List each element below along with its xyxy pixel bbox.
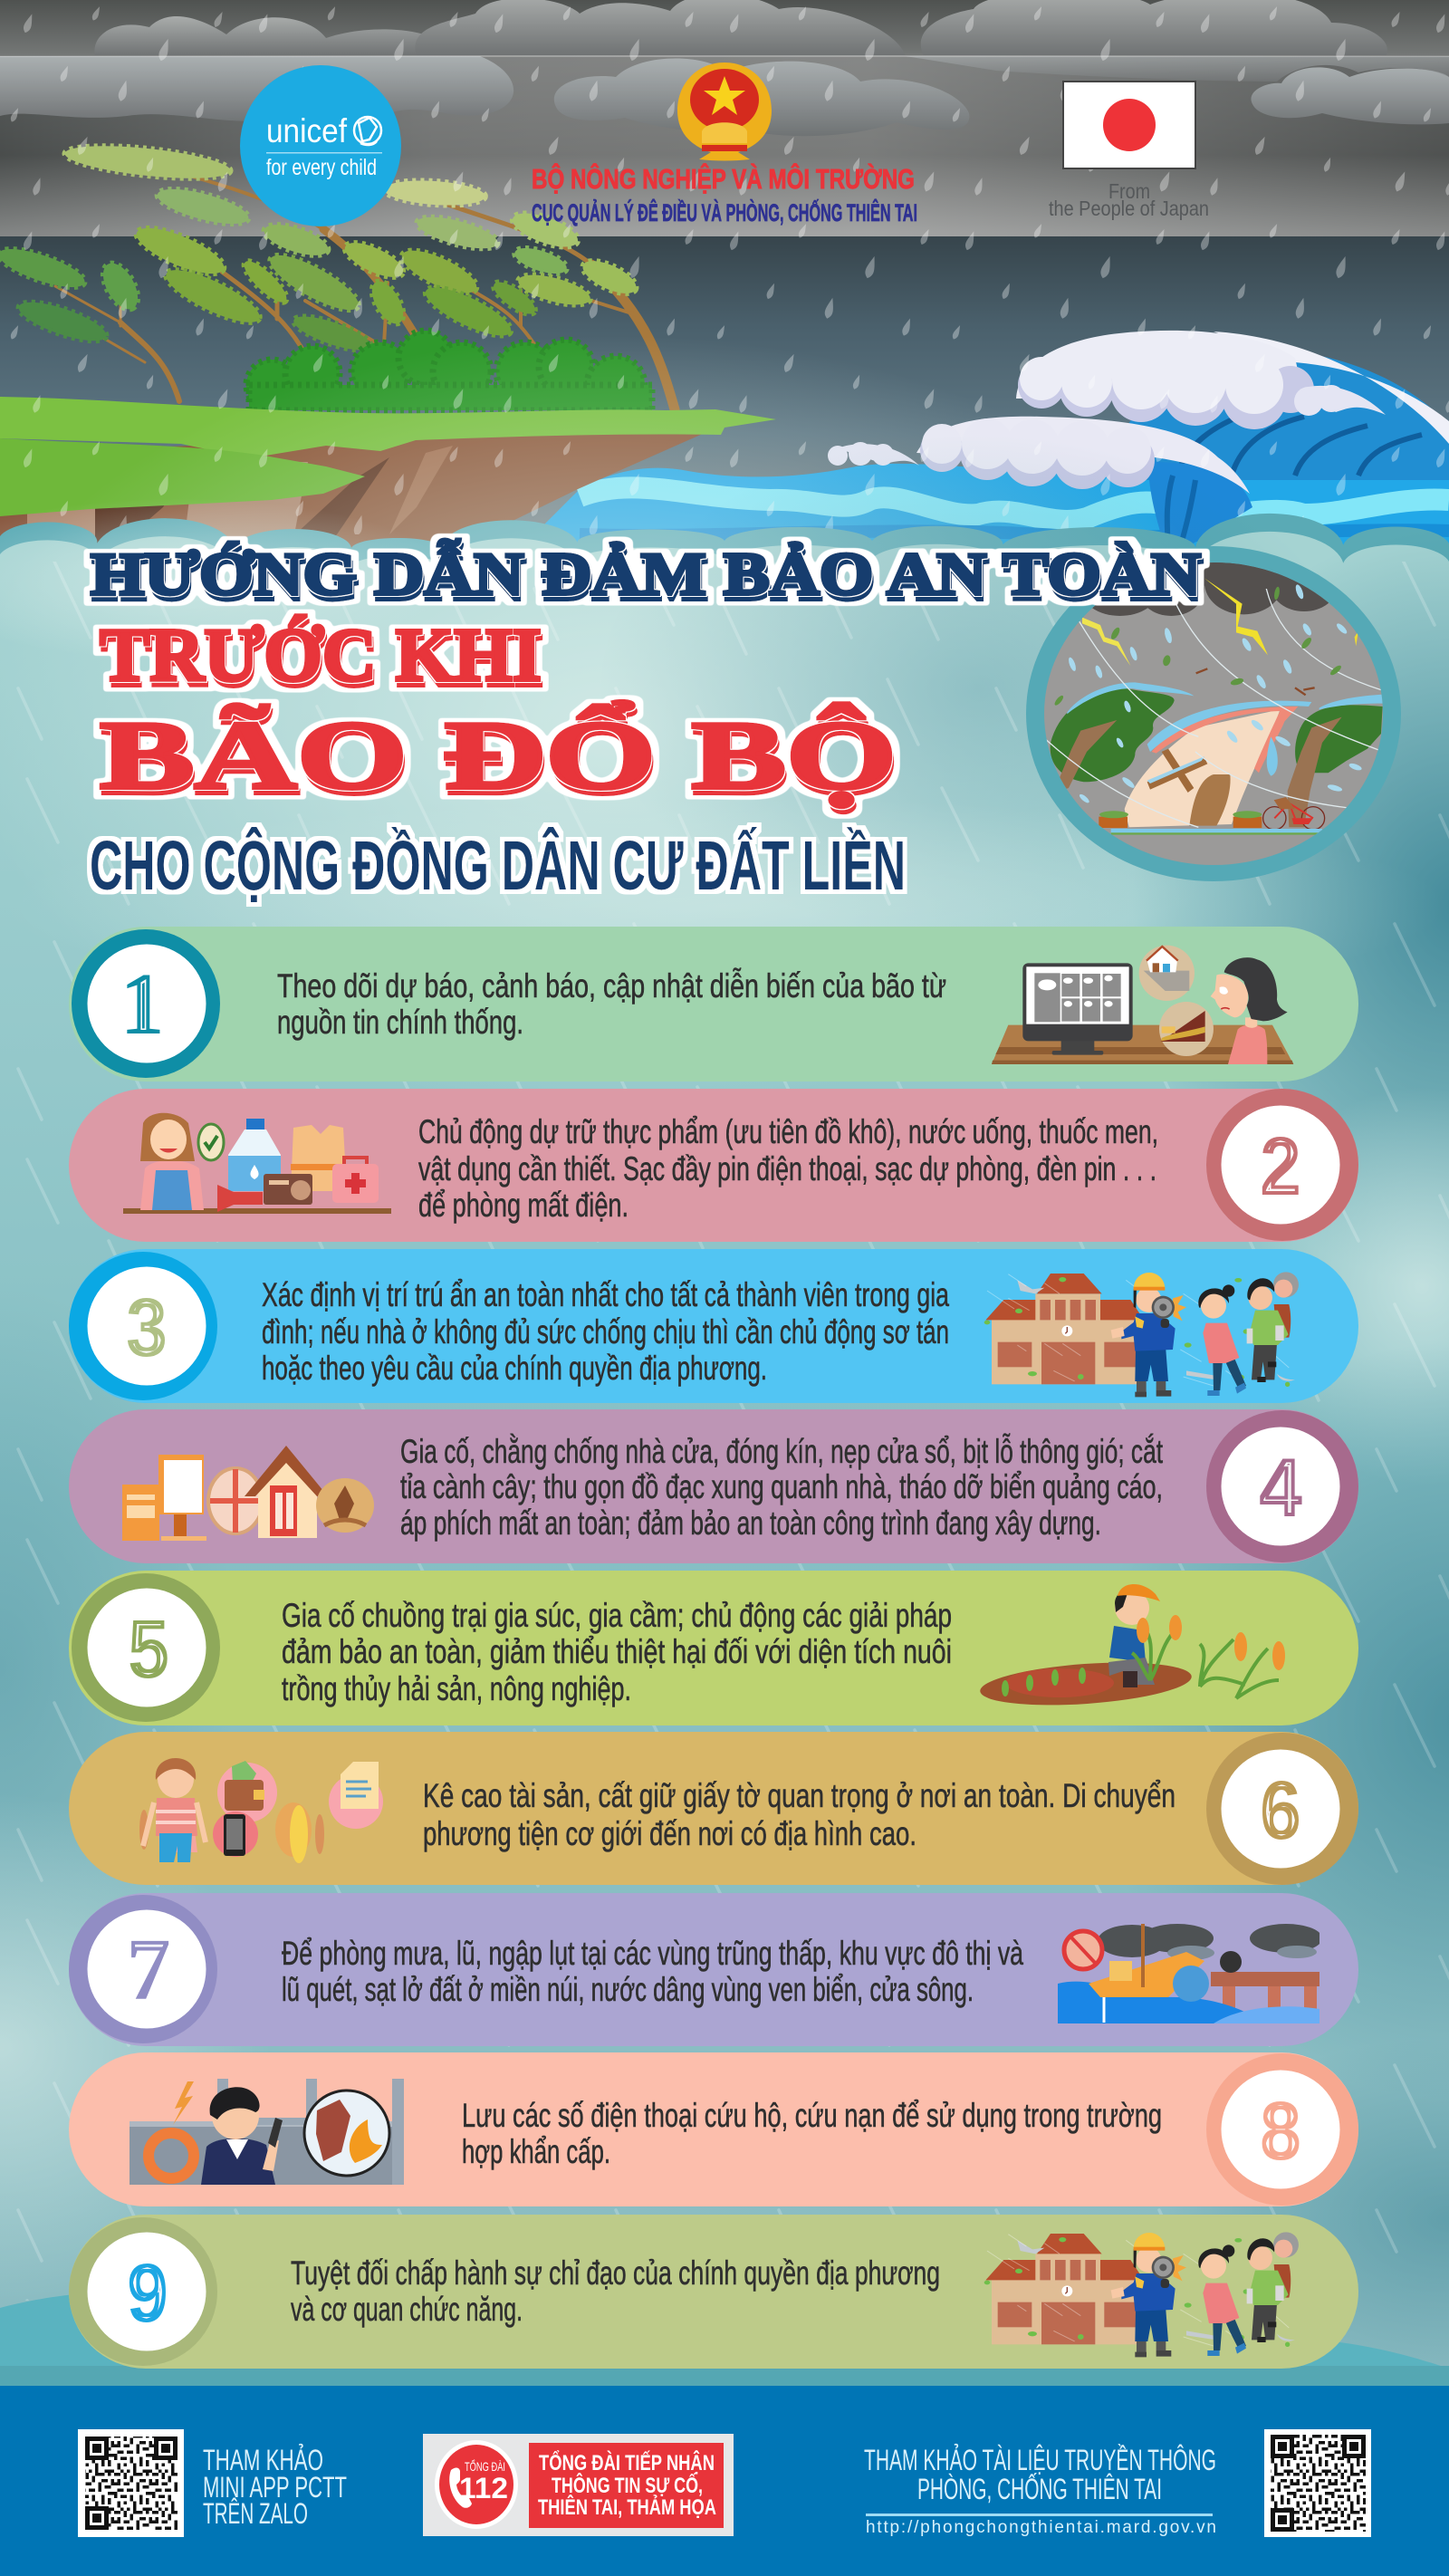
dark storm clouds — [1092, 562, 1329, 616]
second wave foam — [916, 417, 1250, 494]
background: teal rainy lower field — [0, 507, 1449, 2391]
logo: national emblem — [677, 62, 772, 161]
step 3 text: đình; nếu nhà ở không đủ sức chống chịu thì cần chủ động sơ tán — [262, 1313, 949, 1350]
number badge 6: 6 — [1260, 1764, 1301, 1857]
icon: evacuation scene — [984, 1272, 1299, 1397]
right footer text: THAM KHẢO TÀI LIỆU TRUYỀN THÔNG — [864, 2444, 1216, 2476]
lower clouds — [0, 56, 1449, 136]
hotline message: THÔNG TIN SỰ CỐ, — [552, 2473, 703, 2498]
step 2 text: Chủ động dự trữ thực phẩm (ưu tiên đồ khô), nước uống, thuốc men, — [418, 1113, 1158, 1150]
big wave body — [1113, 349, 1449, 480]
icon: evacuation scene repeat — [984, 2232, 1299, 2357]
right footer text: PHÒNG, CHỐNG THIÊN TAI — [917, 2473, 1162, 2505]
scene: trees on cliff — [0, 139, 675, 414]
hotline badge — [435, 2440, 518, 2529]
step 5 text: trồng thủy hải sản, nông nghiệp. — [282, 1670, 631, 1707]
logo: unicef — [240, 65, 401, 226]
number badge 2 — [1206, 1089, 1358, 1241]
second wave trunk — [1148, 462, 1252, 557]
band background — [0, 55, 1449, 236]
japan caption — [1049, 179, 1209, 220]
left footer text — [203, 2444, 347, 2530]
scallop rim — [0, 514, 1449, 2386]
translucent band — [0, 55, 1449, 236]
tree trunks — [55, 172, 675, 409]
gray inner — [1044, 562, 1383, 865]
big wave foam — [1016, 331, 1449, 444]
icon: woman watching forecast — [992, 946, 1293, 1064]
step 4 text: áp phích mất an toàn; đảm bảo an toàn công trình đang xây dựng. — [400, 1504, 1101, 1542]
panel: step 6 — [69, 1732, 1358, 1885]
unicef wordmark: unicef — [266, 112, 348, 149]
left tree — [1051, 688, 1175, 782]
step 1 text: Theo dõi dự báo, cảnh báo, cập nhật diễn biến của bão từ — [277, 967, 946, 1004]
storm sky with clouds — [0, 0, 1449, 542]
left footer text: THAM KHẢO — [203, 2444, 323, 2476]
step 4 text: Gia cố, chằng chống nhà cửa, đóng kín, nẹp cửa sổ, bịt lỗ thông gió; cắt — [400, 1433, 1164, 1470]
step 7 text: Để phòng mưa, lũ, ngập lụt tại các vùng trũng thấp, khu vực đô thị và — [282, 1935, 1023, 1972]
step 3 text — [262, 1276, 949, 1387]
rock — [0, 426, 721, 554]
for every child: for every child — [266, 155, 377, 180]
raindrops and leaves — [1067, 583, 1363, 804]
sky gradient — [0, 234, 1449, 542]
icon: boat in flood — [1058, 1924, 1322, 2023]
hotline message: THIÊN TAI, THẢM HỌA — [538, 2494, 716, 2520]
step 8 text: hợp khẩn cấp. — [462, 2133, 610, 2170]
QR code right — [1264, 2429, 1371, 2537]
panel: step 4 — [69, 1409, 1358, 1563]
step 6 text: phương tiện cơ giới đến nơi có địa hình cao. — [423, 1815, 916, 1852]
planters — [1099, 817, 1262, 828]
panel: step 3 — [69, 1249, 1358, 1403]
teal ring — [1026, 546, 1401, 881]
step 7 text — [282, 1935, 1023, 2008]
upper grass — [0, 397, 776, 458]
step 2 text — [418, 1113, 1158, 1224]
light wave strip — [580, 487, 1449, 521]
footer background — [0, 2386, 1449, 2576]
step 6 text: Kê cao tài sản, cất giữ giấy tờ quan trọng ở nơi an toàn. Di chuyển — [423, 1777, 1176, 1814]
number badge 6 — [1206, 1733, 1358, 1885]
number badge 7: 7 — [127, 1921, 170, 2019]
left footer text: TRÊN ZALO — [203, 2497, 308, 2530]
bottom hills — [0, 2292, 1449, 2391]
step 3 text: hoặc theo yêu cầu của chính quyền địa phương. — [262, 1350, 767, 1387]
storm circle illustration — [1026, 519, 1401, 881]
door — [1189, 774, 1231, 826]
hotline badge: TỔNG ĐÀI — [465, 2458, 505, 2474]
number badge 8 — [1206, 2053, 1358, 2206]
bicycle — [1263, 803, 1325, 830]
upper clouds — [94, 0, 1387, 56]
right tree — [1295, 705, 1383, 773]
sea and waves — [507, 331, 1449, 580]
rain streaks — [0, 562, 1449, 2301]
scene — [1047, 562, 1383, 835]
number badge 5: 5 — [128, 1603, 169, 1696]
number badge 9: 9 — [127, 2247, 168, 2340]
step 8 text — [462, 2097, 1162, 2170]
upper dark strip — [0, 0, 1449, 56]
number badge 4: 4 — [1259, 1442, 1302, 1534]
title line 2: TRƯỚC KHI — [100, 613, 542, 697]
panel: step 9 — [69, 2215, 1358, 2369]
sea body — [507, 464, 1449, 580]
hotline 112 box — [423, 2434, 734, 2536]
cliff with grass — [0, 397, 776, 566]
wind lines — [1046, 589, 1381, 827]
panel: step 7 — [69, 1893, 1358, 2046]
foliage clusters — [0, 139, 640, 357]
step 5 text: đảm bảo an toàn, giảm thiểu thiệt hại đối với diện tích nuôi — [282, 1633, 952, 1670]
hotline message — [529, 2443, 724, 2528]
step 9 text — [291, 2254, 940, 2328]
hotline message: TỔNG ĐÀI TIẾP NHẬN — [539, 2450, 715, 2475]
number badge 5 — [72, 1573, 220, 1722]
step 1 text: nguồn tin chính thống. — [277, 1004, 523, 1041]
lightning — [1082, 618, 1130, 666]
number badge 1 — [72, 929, 220, 1078]
number badge 3: 3 — [126, 1282, 168, 1374]
step 9 text: và cơ quan chức năng. — [291, 2291, 523, 2328]
QR code left — [78, 2429, 184, 2537]
dark wave strip — [580, 530, 1449, 537]
japan caption: the People of Japan — [1049, 197, 1209, 220]
icon: reinforced house — [122, 1446, 374, 1541]
step 7 text: lũ quét, sạt lở đất ở miền núi, nước dâng vùng ven biển, cửa sông. — [282, 1971, 974, 2008]
unicef emblem — [354, 117, 381, 145]
ground strip — [1111, 829, 1322, 835]
number badge 3 — [69, 1252, 217, 1400]
number badge 1: 1 — [120, 956, 165, 1053]
title block — [90, 538, 1201, 905]
scallop inner field — [0, 532, 1449, 2404]
step 5 text: Gia cố chuồng trại gia súc, gia cầm; chủ động các giải pháp — [282, 1597, 952, 1634]
step 8 text: Lưu các số điện thoại cứu hộ, cứu nạn để sử dụng trong trường — [462, 2097, 1162, 2134]
footer — [0, 2386, 1449, 2576]
right footer text: http://phongchongthientai.mard.gov.vn — [866, 2518, 1216, 2537]
department name: CỤC QUẢN LÝ ĐÊ ĐIỀU VÀ PHÒNG, CHỐNG THIÊN TAI — [532, 197, 917, 226]
icon: farmer and rice — [979, 1584, 1285, 1711]
logo: japan flag — [1063, 82, 1195, 168]
step 4 text: tỉa cành cây; thu gọn đồ đạc xung quanh nhà, tháo dỡ biển quảng cáo, — [400, 1468, 1163, 1505]
small wave foam — [828, 442, 919, 466]
panel: step 8 — [69, 2052, 1358, 2206]
step 6 text — [423, 1777, 1176, 1852]
right footer text — [864, 2444, 1216, 2537]
step 3 text: Xác định vị trí trú ẩn an toàn nhất cho tất cả thành viên trong gia — [262, 1276, 949, 1313]
number badge 9 — [69, 2217, 217, 2366]
small foam curl — [1294, 385, 1386, 416]
step 9 text: Tuyệt đối chấp hành sự chỉ đạo của chính quyền địa phương — [291, 2254, 940, 2292]
japan caption: From — [1108, 179, 1150, 203]
left footer text: MINI APP PCTT — [203, 2471, 347, 2504]
panel: step 1 — [69, 927, 1358, 1081]
hotline badge: 112 — [459, 2472, 508, 2504]
step 4 text — [400, 1433, 1164, 1542]
icon: phone rescue man — [130, 2079, 404, 2185]
lower grass — [0, 438, 365, 516]
step 2 text: để phòng mất điện. — [418, 1187, 629, 1224]
icon: supplies and woman — [123, 1113, 391, 1214]
panel: step 2 — [69, 1089, 1358, 1242]
step 5 text — [282, 1597, 952, 1707]
title line 3: BÃO ĐỔ BỘ — [100, 700, 897, 810]
title line 1: HƯỚNG DẪN ĐẢM BẢO AN TOÀN — [91, 538, 1201, 608]
ministry name: BỘ NÔNG NGHIỆP VÀ MÔI TRƯỜNG — [532, 162, 915, 195]
icon: person and documents — [139, 1758, 383, 1863]
number badge 4 — [1206, 1410, 1358, 1562]
bush — [246, 331, 652, 414]
number badge 7 — [69, 1895, 217, 2043]
broken window boards — [1147, 749, 1207, 793]
number badge 2: 2 — [1260, 1120, 1301, 1213]
number badge 8: 8 — [1260, 2085, 1301, 2177]
panel: step 5 — [69, 1571, 1358, 1725]
step 2 text: vật dụng cần thiết. Sạc đầy pin điện thoại, sạc dự phòng, đèn pin . . . — [418, 1150, 1156, 1187]
title line 4: CHO CỘNG ĐỒNG DÂN CƯ ĐẤT LIỀN — [90, 825, 906, 905]
step 1 text — [277, 967, 946, 1041]
damaged house — [1125, 709, 1280, 827]
rain over sky — [0, 0, 1449, 534]
header logos — [240, 62, 1209, 226]
